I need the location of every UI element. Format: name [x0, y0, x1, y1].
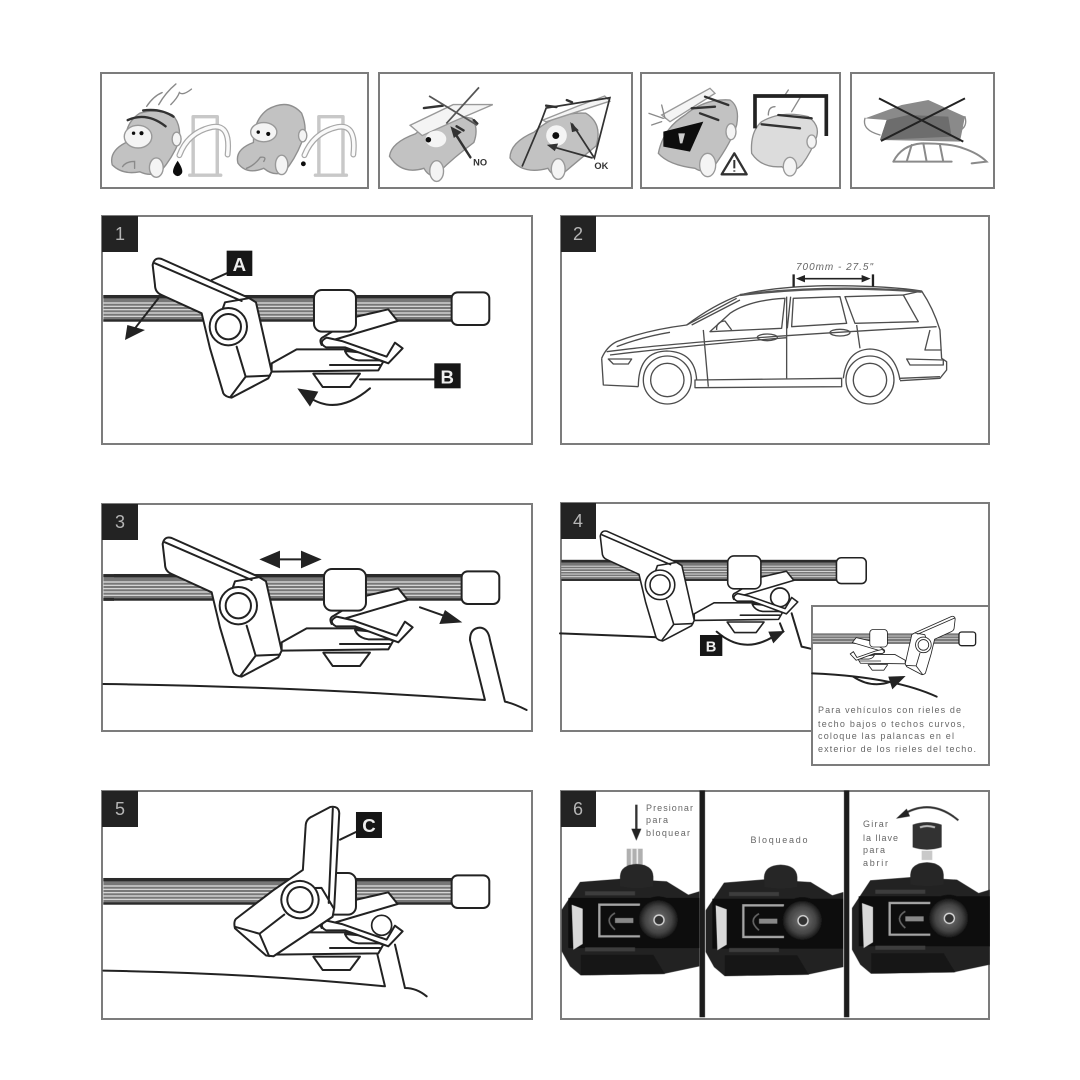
inset note [818, 705, 976, 754]
roof line and rail [103, 628, 527, 710]
step number 1: 1 [115, 224, 125, 244]
icon: fuel pump with large oil drop [173, 117, 228, 176]
lever C closed [207, 805, 379, 966]
inset roof line [812, 673, 937, 697]
icon: warning triangle [722, 153, 747, 174]
caption: press to lock: bloquear [646, 828, 690, 838]
step number 4 [561, 503, 596, 539]
step number 2 [561, 216, 596, 252]
inset note: techo bajos o techos curvos, [818, 719, 965, 729]
label: NO: NO [473, 158, 487, 168]
inset arrow [853, 676, 906, 689]
label A: A [233, 254, 246, 275]
panel: load placement [379, 73, 632, 188]
panel 3: position clamp on roof rail [102, 504, 532, 731]
clamp assembly [561, 531, 866, 641]
caption: turn key: para [863, 845, 885, 855]
label: OK: OK [594, 161, 609, 171]
inset note: Para vehículos con rieles de [818, 705, 961, 715]
sliding block [314, 290, 356, 332]
panel: height clearance warning [641, 73, 840, 188]
step number 3 [102, 504, 138, 540]
panel 5: close lever [102, 791, 532, 1019]
caption: locked: Bloqueado [750, 835, 808, 845]
icon: normal car [237, 104, 307, 175]
arrow: rotate lever [717, 631, 785, 645]
caption: press to lock: Presionar [646, 803, 693, 813]
photo: turn key to open [852, 807, 990, 974]
arrow: pull lever [125, 298, 158, 340]
rail knob [372, 915, 392, 935]
label C: C [362, 815, 376, 836]
caption: turn key [863, 819, 898, 868]
clamp jaw [272, 309, 403, 387]
caption: press to lock [646, 803, 693, 838]
photo: press to lock [562, 805, 699, 975]
inset note: exterior de los rieles del techo. [818, 744, 976, 754]
panel 6: lock sequence [561, 791, 990, 1019]
arrow: toward rail [420, 607, 462, 624]
inset: low roof rails [812, 606, 989, 765]
station wagon drawing [602, 286, 947, 404]
dividers [699, 791, 849, 1017]
step number 6 [561, 791, 596, 827]
icon: incorrect load with crossed board [389, 87, 493, 181]
lever A [153, 258, 272, 398]
panel 1: open lever [102, 216, 532, 444]
inset bar and cap [813, 632, 976, 646]
icon: fuel pump with small oil drop [301, 117, 354, 175]
caption: turn key: la llave [863, 833, 898, 843]
label C [340, 812, 382, 840]
panel: no roof tent [851, 73, 994, 188]
caption: turn key: abrir [863, 858, 888, 868]
top strip of warning pictograms [101, 73, 994, 188]
icon: crossed-out roof tent on a car [864, 98, 987, 163]
step number 5: 5 [115, 799, 125, 819]
label B [700, 635, 722, 656]
roof bar with end cap [103, 292, 489, 325]
icon: overheating car with oil leak [112, 84, 191, 177]
label A [212, 251, 252, 280]
arrow: slide both ways [259, 551, 322, 568]
step number 6: 6 [573, 799, 583, 819]
label B: B [706, 639, 716, 655]
label B [360, 363, 461, 388]
caption: press to lock: para [646, 815, 668, 825]
step number 3: 3 [115, 512, 125, 532]
dimension label: 700mm - 27.5" [796, 262, 873, 273]
rail knob behind clamp [771, 588, 789, 607]
roof line [560, 613, 813, 649]
panel: fuel and car smoke warning [101, 73, 368, 188]
panel 4: tighten lever [560, 503, 989, 765]
dimension arrow [794, 274, 873, 287]
arrow: rotate B [297, 388, 370, 407]
step number 2: 2 [573, 224, 583, 244]
clamp assembly [103, 537, 499, 677]
inset mirrored clamp [850, 616, 955, 675]
clamp assembly with closed lever [103, 873, 489, 970]
caption: turn key: Girar [863, 819, 888, 829]
icon: car hitting an obstacle [649, 88, 737, 177]
inset note: coloque las palancas en el [818, 731, 954, 741]
step number 1 [102, 216, 138, 252]
photo: locked [706, 865, 843, 976]
icon: car under a low gate [751, 90, 826, 176]
step number 5 [102, 791, 138, 827]
icon: correct load with strap arrows [510, 96, 610, 179]
roof line and rail [103, 945, 427, 996]
step number 4: 4 [573, 511, 583, 531]
panel 2: car side view with bar spacing [561, 216, 989, 444]
label B: B [441, 366, 454, 387]
